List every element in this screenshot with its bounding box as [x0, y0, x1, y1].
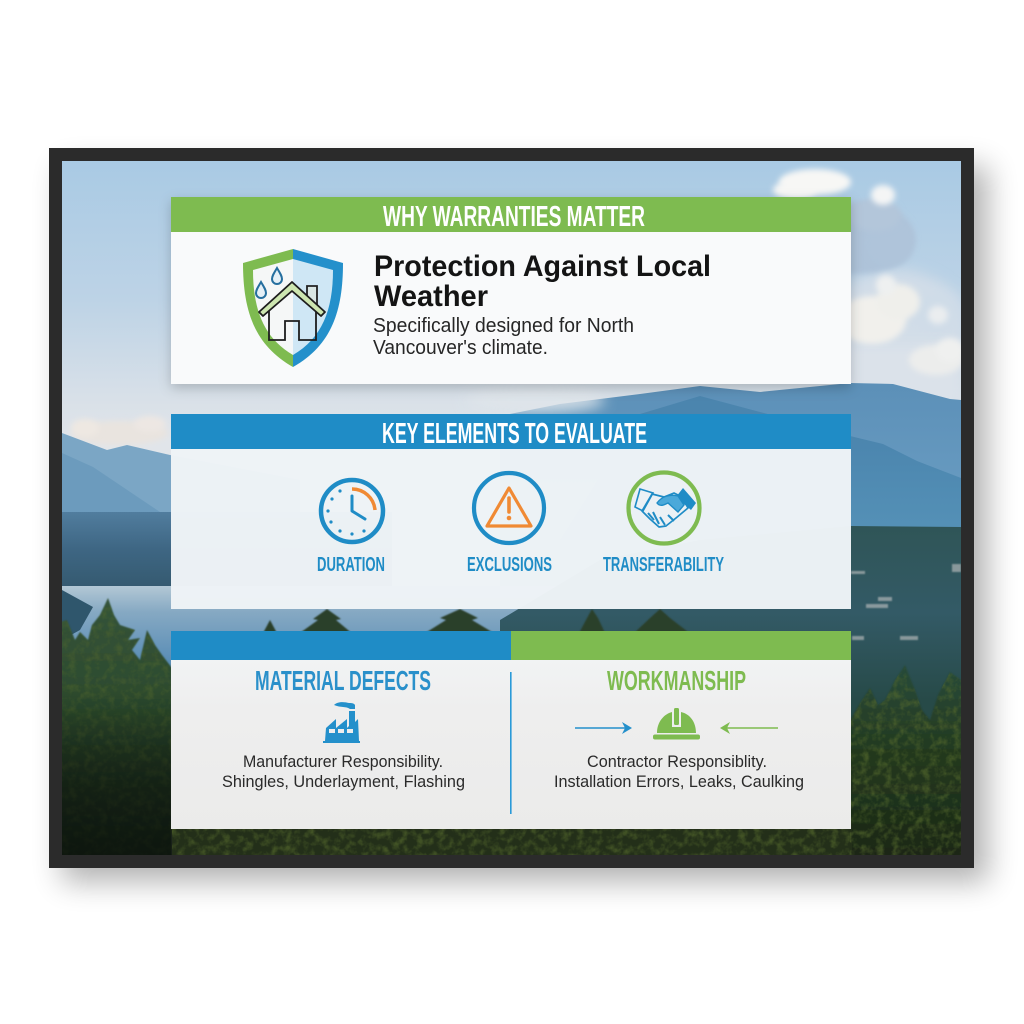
text: contractor responsibility: [554, 753, 804, 791]
text: manufacturer responsibility: [222, 753, 465, 791]
foliage texture: [50, 598, 975, 870]
label: transferability: TRANSFERABILITY: [603, 554, 724, 576]
text: manufacturer responsibility: Shingles, Underlayment, Flashing: [222, 773, 465, 791]
icon: handshake: [628, 472, 700, 544]
header bar: blue: [171, 631, 511, 660]
tree tops between panels: [263, 609, 688, 631]
background landscape photo: [50, 161, 975, 870]
haze over mountains: [510, 398, 611, 414]
icon: factory: [323, 702, 360, 743]
heading: key elements to evaluate: KEY ELEMENTS TO EVALUATE: [382, 418, 647, 450]
description: climate: [373, 315, 634, 359]
right forested hills: [500, 526, 961, 720]
heading: workmanship: WORKMANSHIP: [607, 665, 746, 696]
far mountains: [510, 383, 961, 478]
title: protection against local weather: [374, 250, 711, 313]
bottom forest strip: [172, 829, 852, 855]
title: protection against local weather: Protection Against Local: [374, 250, 711, 283]
near ridge: [640, 396, 961, 527]
icon: shield with house and rain: [243, 249, 343, 367]
text: manufacturer responsibility: Manufacturer Responsibility.: [243, 753, 443, 771]
left foreground trees: [62, 598, 172, 855]
right foreground trees: [851, 666, 961, 855]
dark picture frame: [49, 148, 974, 868]
water: [62, 586, 518, 668]
heading bar: key elements: [171, 414, 851, 449]
heading bar: why warranties matter: [171, 197, 851, 232]
text: contractor responsibility: Installation Errors, Leaks, Caulking: [554, 773, 804, 791]
panel: why warranties matter: [171, 197, 851, 384]
panel: material defects vs workmanship: [171, 631, 851, 829]
description: climate: Specifically designed for North: [373, 315, 634, 337]
arrow: green left: [720, 722, 778, 734]
header bar: green: [511, 631, 851, 660]
label: duration: DURATION: [317, 554, 385, 576]
heading: material defects: MATERIAL DEFECTS: [255, 665, 431, 696]
frame drop shadow: [62, 166, 988, 882]
icon: warning triangle: [474, 473, 544, 543]
title: protection against local weather: Weather: [374, 280, 488, 313]
panel: key elements to evaluate: [171, 414, 851, 609]
heading: why warranties matter: WHY WARRANTIES MATTER: [383, 201, 645, 233]
icon: hard hat: [653, 708, 700, 740]
label: exclusions: EXCLUSIONS: [467, 554, 552, 576]
dark forested far shore left: [62, 512, 171, 586]
text: contractor responsibility: Contractor Responsiblity.: [587, 753, 767, 771]
houses on hillside: [851, 564, 961, 640]
arrow: blue right: [575, 722, 632, 734]
description: climate: Vancouver's climate.: [373, 337, 548, 359]
clouds: [71, 169, 965, 445]
center divider: [510, 672, 512, 814]
icon: clock: [321, 480, 383, 542]
